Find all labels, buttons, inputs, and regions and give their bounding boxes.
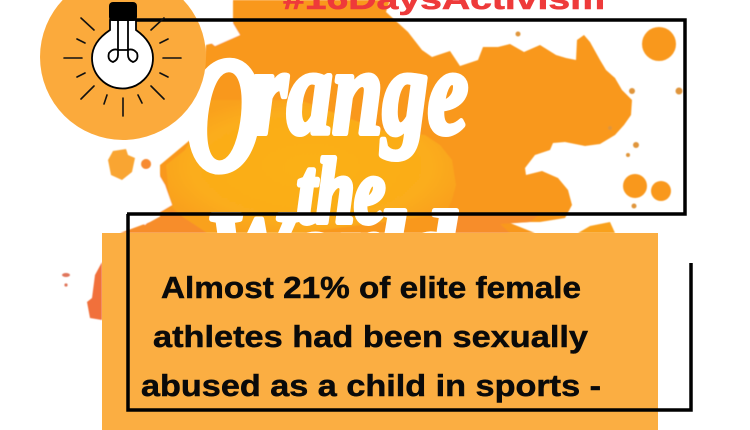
slogan lettering: Orange the World: O: [186, 23, 262, 206]
main statement text: abused as a child in sports -: [141, 368, 601, 403]
icon circle: [40, 0, 206, 140]
slogan lettering: Orange the World: [186, 23, 468, 307]
icon: light bulb: [64, 2, 181, 116]
white flecks: [205, 0, 240, 46]
slogan lettering: Orange the World: range: [252, 25, 468, 160]
main statement text: Almost 21% of elite female: [161, 270, 581, 305]
slogan lettering: Orange the World: World: [205, 190, 456, 307]
orange text panel: [102, 233, 658, 430]
main statement text: athletes had been sexually: [153, 319, 589, 354]
orange paint splash background: [62, 0, 682, 320]
main statement text: [141, 270, 601, 403]
upper black frame: [127, 20, 685, 214]
slogan lettering: Orange the World: the: [297, 140, 385, 242]
side drops: [642, 27, 676, 61]
lower black frame: [128, 214, 691, 410]
left splash behind panel: [87, 262, 102, 320]
